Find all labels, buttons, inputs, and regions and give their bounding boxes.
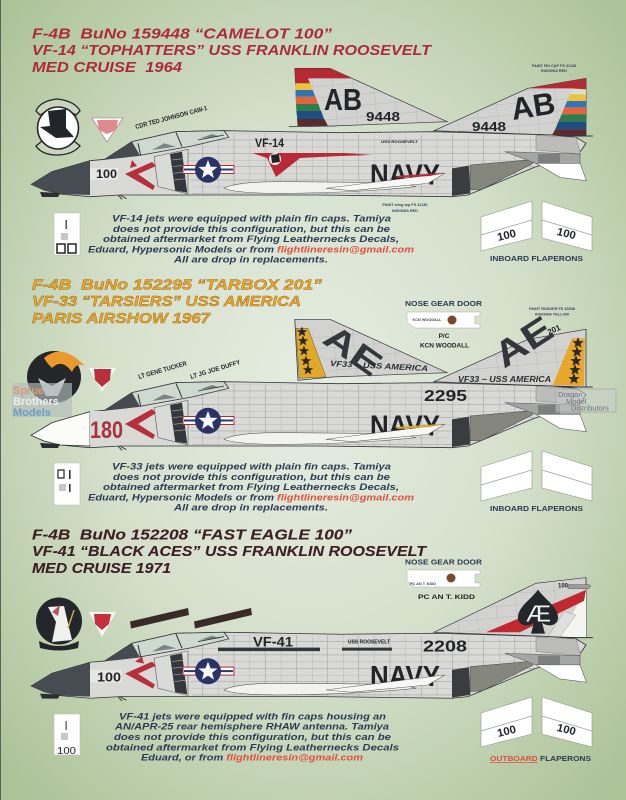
flaperons: 100 [496,724,517,740]
title: VF-14: F-4B BuNo 159448 “CAMELOT 100” [32,26,333,42]
fin number: 100 [558,584,569,590]
fin tip antenna [568,585,591,589]
text line with email: Eduard, Hypersonic Models or from flightlineresin@gmail.com [88,492,415,504]
title: VF-14: MED CRUISE 1964 [32,59,183,76]
tail number left: 9448 [366,110,400,124]
crew name: KCN WOODALL [420,342,469,350]
tail number: 2208 [423,639,467,656]
modex: 100 [97,670,121,685]
red wing tip [395,173,445,178]
watermark: distributor [556,389,616,412]
paint note: rudder: INSIGNIA YELLOW [535,312,569,316]
flaperons [481,697,592,747]
NAVY: NAVY [370,410,440,442]
flaperons: 100 [556,722,577,738]
red modex: 180 [90,417,123,444]
text block: note: AN/APR-25 rear hemisphere RHAW antenna. Tamiya [114,722,390,732]
paint note: fin cap: PAINT FIN CAP FS 31136 [532,64,576,68]
NAVY: NAVY [370,160,440,192]
yellow wing tip [395,424,445,429]
title: VF-14 [32,26,433,76]
roundel [183,408,234,434]
small decal sheet [54,714,80,757]
side number [90,168,118,180]
near fin ship: VF33 ~ USS AMERICA [458,375,551,384]
canopy rail strips [130,608,252,628]
tail code left: AB [324,82,362,117]
icon: VF-14 top hat squadron badge [36,99,80,155]
text block: note: obtained aftermarket from Flying Leathernecks Decals, [103,482,399,493]
text block: note: does not provide this configuration, but this can be [114,732,392,743]
title: VF-41 [32,526,428,577]
wing and tank [224,173,445,193]
icon: VF-41 Black Aces badge [36,598,82,650]
near fin [434,329,586,387]
title: VF-41: MED CRUISE 1971 [32,560,171,577]
white radome [31,412,90,446]
text line: replacements: All are drop in replacements. [173,254,328,266]
fin [434,578,586,638]
hat emblem [269,153,281,165]
flaperons [481,451,592,501]
text block: note: obtained aftermarket from Flying Leathernecks Decals, [103,234,399,245]
flaperon label: OUTBOARD FLAPERONS [490,754,591,763]
spine stripe [218,648,392,651]
flaperon label: INBOARD FLAPERONS [490,254,583,263]
far fin ship: VF33 ~ USS AMERICA [330,359,428,373]
red modex [90,411,123,445]
nose gear door: KCN WOODALL [413,318,442,322]
paint note: wing tip: INSIGNIA RED [392,209,418,213]
text block: note: VF-33 jets were equipped with plain fin caps. Tamiya [112,462,392,472]
flaperons: 100 [556,226,577,242]
red chevron [125,657,156,689]
text line: replacements: All are drop in replacements. [173,502,328,514]
pilot name: CDR TED JOHNSON CAW-1 [135,105,208,131]
flaperons: 100 [496,228,517,244]
watermark: Sprue Brothers Models: Sprue [13,385,44,397]
far fin with rainbow [289,68,447,127]
small decal sheet: 100 [57,746,76,757]
pilot names: LT GENE TUCKER [138,360,188,381]
small decal sheet [54,463,80,505]
roundel [183,658,234,684]
far fin code: AE [316,317,389,384]
paint note: rudder: PAINT RUDDER FS 33538 [529,307,575,311]
tail code right: AB [509,85,558,127]
text line with email: Eduard, Hypersonic Models or from flightlineresin@gmail.com [88,244,415,256]
icon: red and white triangle insignia [92,118,123,142]
modex on fin: 201 [546,323,562,337]
icon: red triangle insignia [89,612,116,637]
flaperon label: INBOARD FLAPERONS [490,504,583,513]
ship text: USS ROOSEVELT [348,640,390,646]
pitot [40,192,60,197]
flaperons [481,201,592,251]
airframe [31,382,593,450]
far fin stars [297,326,313,374]
pitot [40,694,60,699]
icon: VF-33 tarsier badge [27,351,85,403]
modex [90,670,122,685]
pitot [40,443,60,448]
text block: note: obtained aftermarket from Flying Leathernecks Decals [106,742,399,754]
radome [31,662,90,697]
pilot names [138,359,242,381]
airframe [31,632,593,701]
watermark: Sprue Brothers Models: Models [13,407,51,419]
crew name: PC AN T. KIDD [418,594,475,601]
jet profile: VF-33 Phantom [31,308,593,450]
text line with email: Eduard, or from flightlineresin@gmail.com [141,752,364,764]
NAVY: NAVY [370,661,440,693]
paint note: wing tip: PAINT wing top FS 31136 [382,203,428,207]
tail number right: 9448 [472,120,506,134]
nose gear door: NOSE GEAR DOOR [405,558,483,566]
jet profile: VF-14 Phantom [31,68,593,199]
watermark: distributor: Distributors [571,404,609,412]
wing [224,675,445,695]
small decal sheet [54,213,80,255]
nose gear door: NOSE GEAR DOOR [405,299,483,308]
squadron text: VF-41 [253,634,293,650]
red chevron [125,409,156,439]
nose gear door [405,558,483,587]
text block: note: does not provide this configuration, but this can be [113,472,391,483]
title: VF-41: VF-41 “BLACK ACES” USS FRANKLIN ROOSEVELT [32,543,428,560]
nose gear door: PC AN T. KIDD [410,582,436,586]
text block: note: VF-14 jets were equipped with plain fin caps. Tamiya [112,214,392,224]
far fin [295,319,447,380]
spade emblem [518,590,558,634]
title: VF-33: VF-33 “TARSIERS” USS AMERICA [32,293,301,310]
title: VF-14: VF-14 “TOPHATTERS” USS FRANKLIN ROOSEVELT [32,42,433,59]
red nose chevron [125,160,156,190]
icon: red arrowhead triangle [89,368,116,392]
watermark: distributor: Dragon [558,390,583,399]
radome [31,161,90,195]
roundel [183,157,234,183]
pilot names: LT JG JOE DUFFY [190,359,242,381]
red fuselage chevron [252,153,372,177]
wing [224,424,445,444]
near fin stars [568,337,584,384]
airframe [31,131,593,199]
squadron text: VF-14 [255,138,285,150]
section: VF-41 Fast Eagle 100 [31,526,593,764]
modex: 100 [96,167,117,181]
ship name: USS ROOSEVELT [381,139,419,144]
paint note: fin cap: INSIGNIA RED [541,69,567,73]
crew label: P/C [439,333,450,340]
watermark: Sprue Brothers Models [12,383,72,419]
text block: note: VF-41 jets were equipped with fin caps housing an [119,712,386,722]
section: VF-14 Camelot 100 [31,26,593,266]
jet profile: VF-41 Phantom [31,578,593,701]
title: VF-33: F-4B BuNo 152295 “TARBOX 201” [32,276,323,294]
title: VF-33 [32,276,323,327]
nose gear door [405,299,483,328]
spade emblem: Æ [526,601,551,627]
text block: note: does not provide this configuration, but this can be [113,224,391,235]
watermark: Sprue Brothers Models: Brothers [13,396,59,408]
title: VF-41: F-4B BuNo 152208 “FAST EAGLE 100” [32,526,353,544]
tail number: 2295 [424,388,467,405]
watermark: distributor: Model [566,397,587,406]
near fin with rainbow [434,78,586,136]
section: VF-33 Tarbox 201 [12,276,616,514]
near fin code: AE [486,308,560,376]
title: VF-33: PARIS AIRSHOW 1967 [32,310,211,327]
